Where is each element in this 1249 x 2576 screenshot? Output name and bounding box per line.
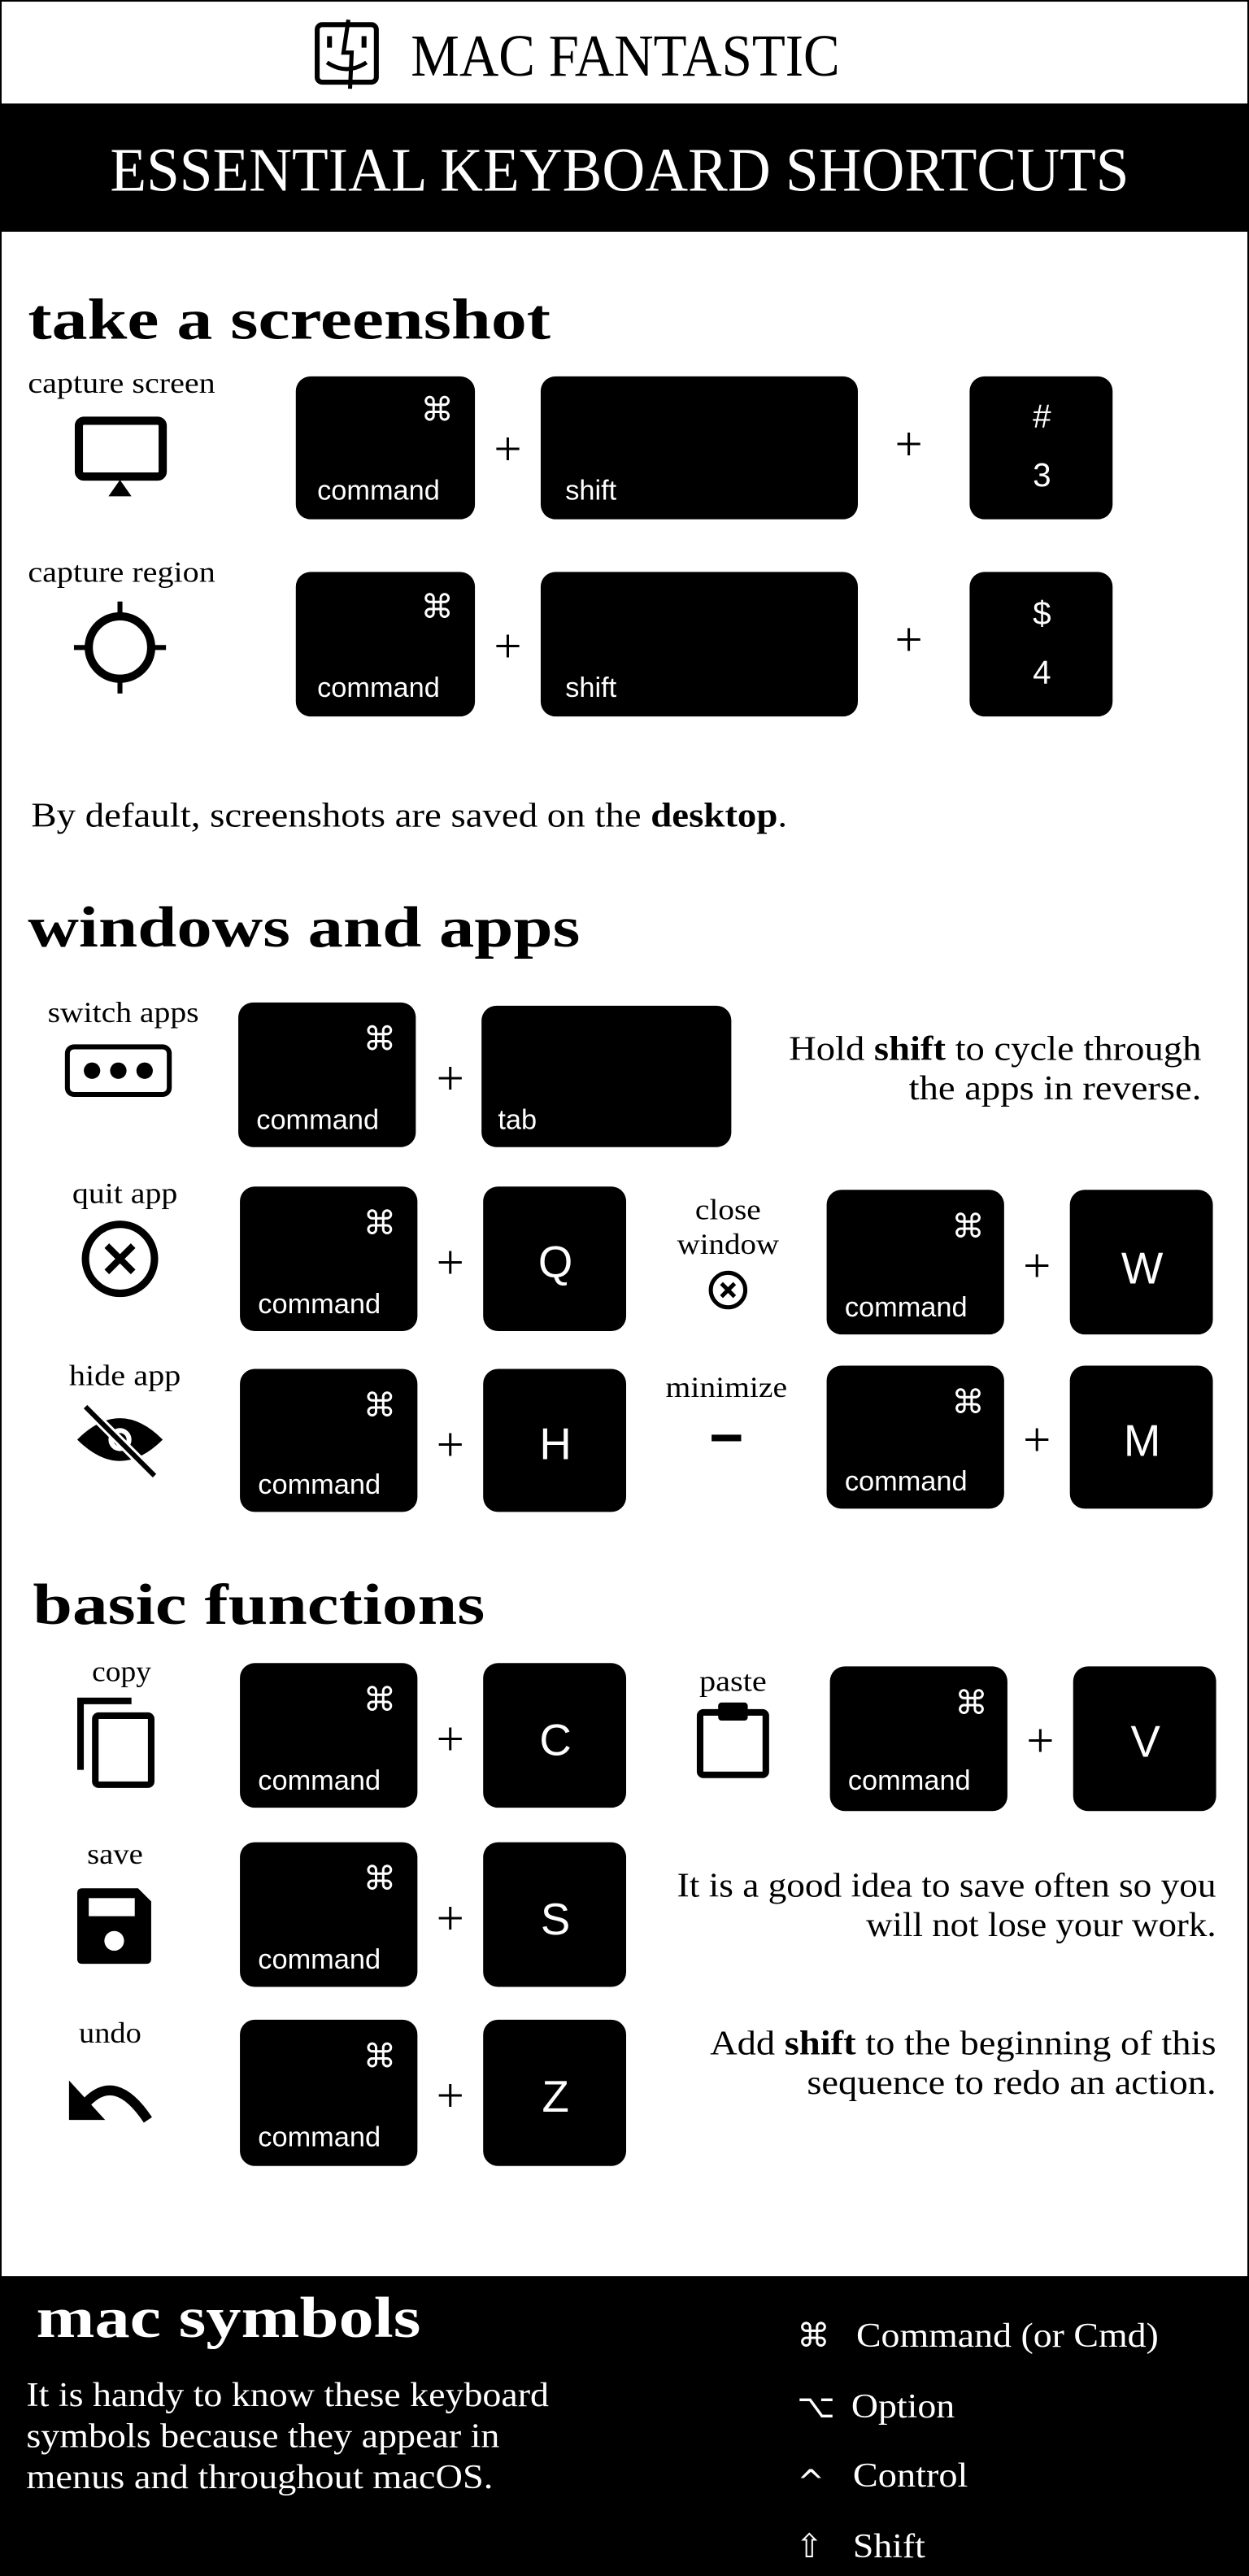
- keys: command V: command: [848, 1765, 971, 1796]
- symbol list: ⌘: [797, 2316, 830, 2355]
- symbol list: ⇧: [795, 2526, 823, 2565]
- keys: command S: [240, 1843, 626, 1986]
- note: reverse: Hold shift to cycle through: [789, 1030, 1201, 1068]
- keys: command shift 4: $: [1033, 594, 1051, 632]
- symbol list: Option: [851, 2387, 955, 2426]
- keys: command Q: [240, 1186, 626, 1331]
- keys: command H: ⌘: [363, 1386, 396, 1424]
- keys: command shift 4: ⌘: [420, 588, 454, 625]
- text: symbols explanation: It is handy to know these keyboard: [26, 2376, 549, 2414]
- keys: command V: V: [1130, 1717, 1160, 1767]
- row: close window: [677, 1190, 1213, 1334]
- symbol list: ^: [797, 2462, 825, 2501]
- keys: command shift 3: [296, 376, 1112, 520]
- row: capture screen: capture screen: [28, 367, 215, 399]
- row: minimize: minimize: [666, 1371, 787, 1403]
- text: symbols explanation: menus and throughout macOS.: [26, 2458, 493, 2496]
- keys: command Z: Z: [542, 2072, 569, 2121]
- row: switch apps: switch apps: [48, 996, 199, 1029]
- keys: command S: ⌘: [363, 1860, 396, 1897]
- keys: command shift 3: ⌘: [420, 390, 454, 428]
- keys: command H: [240, 1369, 626, 1512]
- keys: command H: +: [437, 1418, 464, 1473]
- keys: command shift 4: command: [317, 672, 440, 703]
- keys: command shift 3: +: [895, 417, 923, 472]
- keys: command shift 4: 4: [1033, 654, 1051, 691]
- panel: mac symbols: [0, 2276, 1249, 2576]
- keys: command M: M: [1124, 1416, 1160, 1466]
- symbol list: Control: [853, 2456, 968, 2495]
- row: paste: paste: [699, 1665, 767, 1698]
- icon: copy: [81, 1701, 151, 1785]
- keys: command C: +: [437, 1712, 464, 1766]
- heading: basic functions: basic functions: [33, 1573, 485, 1637]
- row: capture region: [28, 555, 1112, 716]
- keys: command shift 4: [296, 572, 1112, 716]
- keys: command C: [240, 1663, 626, 1808]
- icon: clipboard: [700, 1703, 766, 1775]
- keys: command V: [830, 1666, 1216, 1811]
- keys: command W: ⌘: [951, 1208, 985, 1245]
- row: quit app: quit app: [72, 1177, 177, 1209]
- note: redo: [710, 2024, 1216, 2102]
- row: capture screen: [28, 367, 1112, 520]
- keys: command Z: +: [437, 2069, 464, 2123]
- keys: command shift 3: 3: [1033, 456, 1051, 494]
- keys: command M: ⌘: [951, 1383, 985, 1421]
- keys: command W: +: [1023, 1238, 1051, 1293]
- row: hide app: hide app: [69, 1360, 181, 1392]
- heading: mac symbols: mac symbols: [36, 2287, 420, 2350]
- keys: command shift 4: +: [494, 619, 522, 673]
- note: save often: [677, 1866, 1216, 1944]
- icon: monitor: [79, 420, 163, 496]
- icon: minimize: [712, 1434, 741, 1441]
- keys: command shift 3: +: [494, 422, 522, 476]
- row: capture region: capture region: [28, 555, 215, 588]
- keys: command shift 3: command: [317, 475, 440, 506]
- icon: crosshair: [74, 602, 166, 694]
- row: minimize: [666, 1365, 1213, 1508]
- keys: command W: [827, 1190, 1213, 1334]
- text: symbols explanation: symbols because they appear in: [26, 2417, 499, 2455]
- note: reverse: the apps in reverse.: [909, 1069, 1201, 1107]
- note: save often: will not lose your work.: [866, 1906, 1216, 1944]
- keys: command W: W: [1121, 1243, 1164, 1293]
- keys: command M: +: [1023, 1413, 1051, 1468]
- row: hide app: [69, 1360, 626, 1512]
- keys: command shift 4: shift: [565, 672, 617, 703]
- row: undo: undo: [79, 2017, 141, 2049]
- keys: command shift 3: #: [1033, 397, 1051, 434]
- symbol list: ⌥: [797, 2387, 835, 2426]
- icon: app switcher: [67, 1046, 169, 1094]
- keys: command tab: command: [256, 1104, 379, 1135]
- keys: command Z: [240, 2020, 626, 2166]
- keys: command Q: command: [258, 1289, 381, 1320]
- icon: quit: [85, 1225, 154, 1294]
- note: redo: Add shift to the beginning of this: [710, 2024, 1216, 2062]
- row: save: save: [87, 1838, 143, 1870]
- row: save: [77, 1838, 1216, 1986]
- keys: command V: ⌘: [955, 1684, 988, 1721]
- keys: command M: [827, 1365, 1213, 1508]
- row: quit app: [72, 1177, 626, 1331]
- row: paste: [699, 1665, 1216, 1811]
- keys: command S: +: [437, 1891, 464, 1946]
- keys: command Z: command: [258, 2121, 381, 2152]
- keys: command Q: +: [437, 1235, 464, 1290]
- note: save often: It is a good idea to save often so you: [677, 1866, 1216, 1904]
- keys: command V: +: [1026, 1714, 1054, 1769]
- keys: command W: command: [845, 1292, 968, 1323]
- row: close window: window: [677, 1228, 780, 1260]
- keys: command S: command: [258, 1944, 381, 1975]
- row: undo: [69, 2017, 1216, 2166]
- icon: undo arrow: [69, 2081, 148, 2120]
- title banner: ESSENTIAL KEYBOARD SHORTCUTS: [110, 135, 1129, 204]
- row: copy: [81, 1656, 626, 1808]
- symbol list: [795, 2316, 1159, 2565]
- keys: command tab: ⌘: [363, 1020, 396, 1057]
- keys: command H: command: [258, 1469, 381, 1500]
- keys: command shift 4: +: [895, 612, 923, 667]
- icon: close: [711, 1273, 746, 1308]
- row: close window: close: [695, 1194, 761, 1226]
- heading: take a screenshot: take a screenshot: [28, 288, 551, 351]
- note: desktop: By default, screenshots are saved on the desktop .: [31, 797, 787, 835]
- keys: command tab: +: [437, 1051, 464, 1106]
- keys: command Z: ⌘: [363, 2037, 396, 2074]
- keys: command tab: [238, 1003, 731, 1147]
- icon: hidden eye: [77, 1407, 163, 1476]
- note: reverse: [789, 1030, 1201, 1107]
- keys: command Q: ⌘: [363, 1204, 396, 1242]
- icon: floppy disk: [77, 1888, 151, 1964]
- brand name: MAC FANTASTIC: [411, 23, 840, 89]
- keys: command C: ⌘: [363, 1681, 396, 1718]
- heading: windows and apps: windows and apps: [28, 896, 580, 959]
- symbol list: Shift: [853, 2527, 925, 2565]
- title banner: [0, 103, 1249, 232]
- keys: command H: H: [539, 1420, 572, 1469]
- keys: command Q: Q: [538, 1237, 572, 1286]
- keys: command shift 3: shift: [565, 475, 617, 506]
- keys: command M: command: [845, 1466, 968, 1497]
- keys: command tab: tab: [498, 1104, 537, 1135]
- keys: command C: command: [258, 1765, 381, 1796]
- note: redo: sequence to redo an action.: [807, 2064, 1216, 2102]
- keys: command S: S: [541, 1895, 570, 1944]
- symbol list: Command (or Cmd): [856, 2317, 1159, 2355]
- row: switch apps: [48, 996, 1201, 1147]
- row: copy: copy: [92, 1656, 152, 1688]
- keys: command C: C: [539, 1715, 572, 1764]
- header logo: [317, 20, 376, 89]
- text: symbols explanation: [26, 2376, 549, 2496]
